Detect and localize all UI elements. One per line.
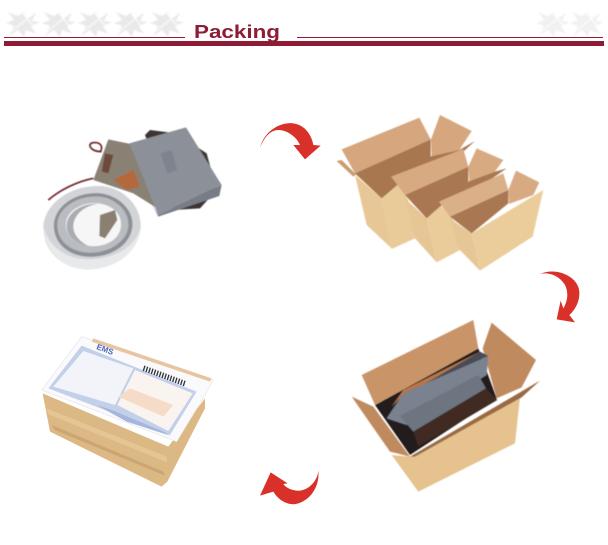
wrapped belt ring (43, 186, 141, 269)
photo: carton with packed goods (352, 320, 540, 492)
carton medium (391, 148, 507, 262)
grey box top (400, 375, 486, 432)
back flap (362, 320, 478, 405)
open book panel (93, 139, 160, 210)
grey box edge (150, 185, 222, 217)
arrow: step two to three (540, 272, 579, 322)
header rule: thin right (297, 37, 603, 38)
photo: three empty cartons (337, 115, 543, 271)
arrow: step one to two (260, 123, 321, 159)
header rule: thin left (4, 37, 185, 38)
product photo: jewellery box and wrapped belt (43, 127, 222, 269)
carton large (337, 115, 475, 249)
title: Packing (194, 22, 280, 42)
box emblem (161, 150, 177, 173)
right flap (483, 323, 536, 398)
carton body (43, 393, 205, 487)
grey box lid (129, 127, 222, 215)
front edge flap (410, 381, 540, 457)
dark book behind box (145, 130, 217, 210)
brown box side (413, 388, 497, 447)
ornament: left floral band (6, 10, 186, 37)
arrow: step three to four (260, 470, 319, 504)
orange sheet (392, 352, 482, 407)
shipping label (42, 337, 213, 442)
left flap (352, 397, 410, 457)
dark back sheets (400, 352, 488, 398)
carton small (439, 171, 543, 271)
label logo: EMS (95, 342, 115, 357)
header banner (4, 10, 606, 46)
grey sheets (387, 356, 488, 425)
ornament: right floral band (536, 10, 606, 37)
cord (48, 143, 102, 200)
carton front (392, 397, 520, 492)
carton interior (375, 348, 497, 455)
barcode (143, 366, 185, 386)
photo: sealed carton with shipping label (42, 337, 213, 487)
header rule: thick (4, 41, 604, 46)
